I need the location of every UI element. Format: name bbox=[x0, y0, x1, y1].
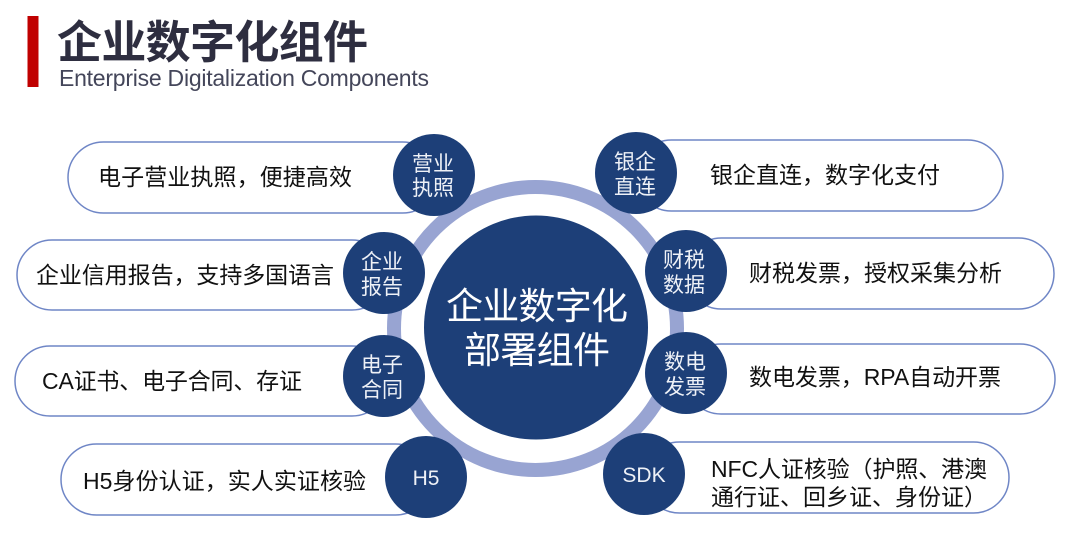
pill: 银企直连: 银企直连，数字化支付 bbox=[710, 162, 940, 188]
pill: 企业信用报告: 企业信用报告，支持多国语言 bbox=[36, 262, 334, 288]
node: 电子合同 bbox=[343, 335, 425, 417]
node: 电子合同: 合同 bbox=[361, 379, 403, 402]
node: 财税数据: 财税 bbox=[663, 249, 705, 272]
node: SDK: SDK bbox=[622, 464, 666, 487]
pill: CA证书: CA证书、电子合同、存证 bbox=[42, 368, 302, 394]
pill: 数电发票 bbox=[686, 344, 1055, 414]
node: 银企直连: 直连 bbox=[614, 176, 656, 199]
node: 营业执照 bbox=[393, 134, 475, 216]
pill: 财税发票: 财税发票，授权采集分析 bbox=[749, 260, 1002, 286]
node: 财税数据 bbox=[645, 230, 727, 312]
node: 营业执照: 营业 bbox=[412, 153, 454, 176]
node: 企业报告: 报告 bbox=[361, 276, 403, 299]
node: SDK bbox=[603, 433, 685, 515]
pill: 电子营业执照 bbox=[68, 142, 438, 213]
node: 数电发票: 发票 bbox=[664, 376, 706, 399]
pill: 电子营业执照: 电子营业执照，便捷高效 bbox=[98, 164, 352, 190]
pill: NFC人证核验: 通行证、回乡证、身份证） bbox=[711, 484, 987, 510]
pill: H5身份认证 bbox=[61, 444, 431, 515]
subtitle: Enterprise Digitalization Components bbox=[59, 65, 429, 91]
pill: H5身份认证: H5身份认证，实人实证核验 bbox=[83, 468, 366, 494]
node: 营业执照: 执照 bbox=[412, 177, 454, 200]
pill: 财税发票 bbox=[686, 238, 1054, 309]
title: 企业数字化组件 bbox=[57, 17, 368, 68]
node: 企业报告 bbox=[343, 232, 425, 314]
outer ring bbox=[394, 187, 677, 470]
pill: NFC人证核验 bbox=[644, 442, 1009, 513]
central circle bbox=[424, 216, 648, 440]
central circle: 部署组件 bbox=[464, 330, 610, 371]
node: 数电发票: 数电 bbox=[664, 351, 706, 374]
node: 财税数据: 数据 bbox=[663, 274, 705, 297]
node: 银企直连 bbox=[595, 132, 677, 214]
node: 数电发票 bbox=[645, 332, 727, 414]
node: 银企直连: 银企 bbox=[614, 151, 656, 174]
node: H5: H5 bbox=[413, 467, 439, 490]
pill: 银企直连 bbox=[636, 140, 1003, 211]
node: H5 bbox=[385, 436, 467, 518]
pill: NFC人证核验: NFC人证核验（护照、港澳 bbox=[711, 456, 987, 482]
pill: 数电发票: 数电发票，RPA自动开票 bbox=[749, 364, 1001, 390]
central circle: 企业数字化 bbox=[446, 286, 628, 327]
pill: CA证书 bbox=[15, 346, 387, 416]
node: 电子合同: 电子 bbox=[361, 354, 403, 377]
title accent bar bbox=[28, 16, 38, 87]
node: 企业报告: 企业 bbox=[361, 251, 403, 274]
pill: 企业信用报告 bbox=[17, 240, 387, 310]
